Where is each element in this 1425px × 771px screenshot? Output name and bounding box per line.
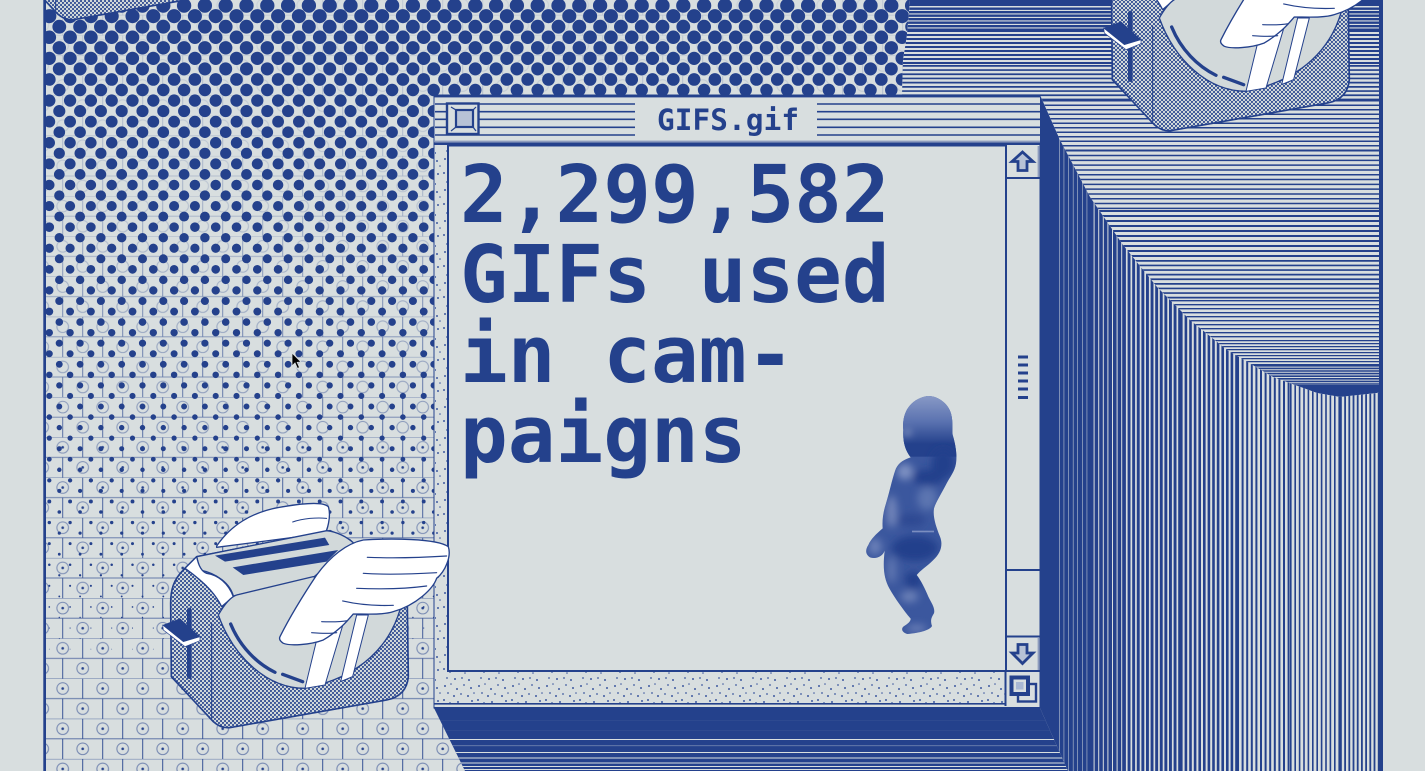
resize box	[1006, 671, 1040, 706]
speckled left strip	[435, 145, 447, 672]
scrollbar	[1006, 145, 1040, 671]
window body	[434, 95, 1040, 708]
floor beneath the window	[430, 706, 1075, 771]
window: GIFS.gif	[434, 95, 1040, 709]
headline	[460, 148, 890, 481]
window title: GIFS.gif	[657, 103, 799, 137]
toaster: lower left, main	[163, 504, 449, 728]
icon: close box	[447, 104, 478, 134]
content pane	[448, 146, 1006, 671]
scroll grip	[1018, 357, 1028, 398]
icon: mouse cursor	[292, 353, 301, 368]
headline: 2,299,582	[460, 148, 890, 241]
toaster: top left, clipped	[46, 0, 190, 20]
icon: down arrow	[1012, 644, 1033, 664]
headline: GIFs used	[460, 228, 890, 321]
headline: in cam-	[460, 308, 794, 401]
halftone dot and brick pattern field	[28, 0, 930, 771]
vertical line field, lower right	[1040, 90, 1382, 771]
speckled bottom strip	[435, 672, 1005, 703]
dancing baby figure	[866, 396, 956, 634]
toaster: top right, clipped	[1104, 0, 1390, 131]
title bar	[434, 95, 1040, 145]
icon: up arrow	[1012, 152, 1033, 170]
horizontal line field, upper right	[900, 0, 1382, 400]
headline: paigns	[460, 388, 746, 481]
